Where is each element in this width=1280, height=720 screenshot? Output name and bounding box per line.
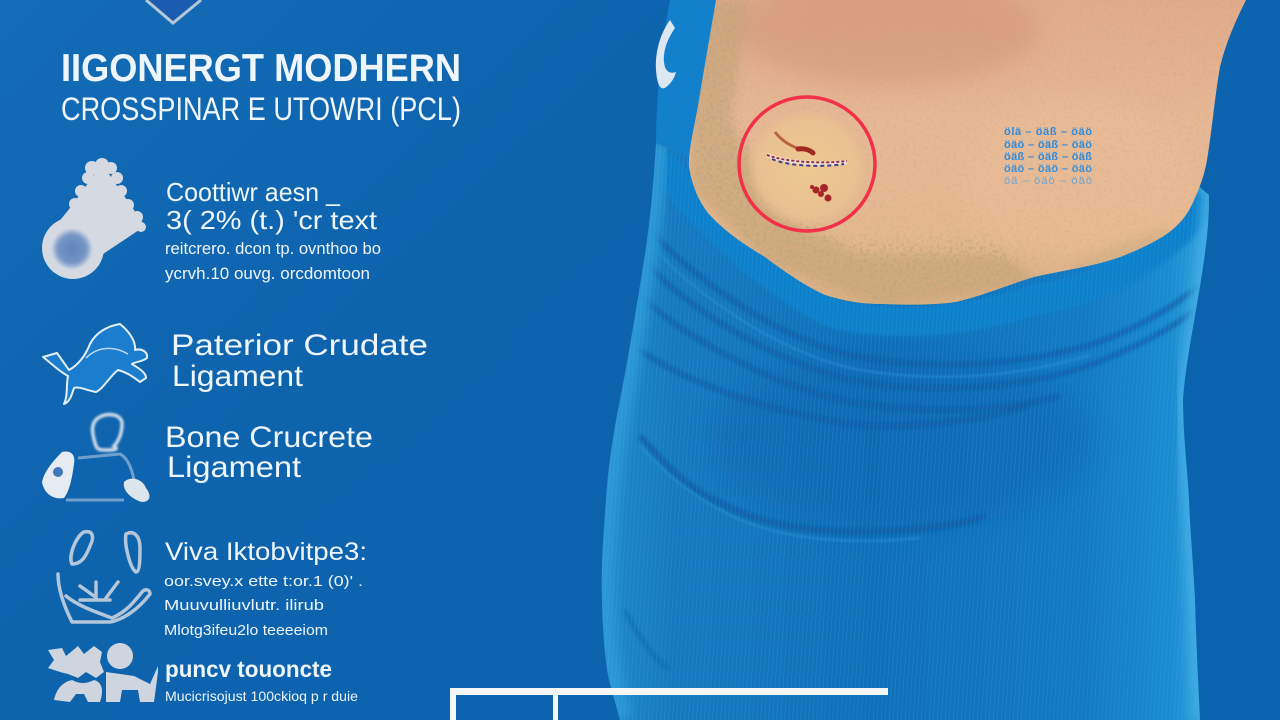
small blue label table: öäß – öäß – öäß <box>1004 151 1092 163</box>
text block: item one: Coottiwr aesn _ <box>166 177 341 207</box>
icon: pieces and seated person <box>48 643 158 702</box>
injury callout <box>739 97 875 231</box>
text block: item four: oor.svey.x ette t:or.1 (0)' . <box>164 573 363 590</box>
text block: item one <box>165 177 381 283</box>
text block: item four <box>164 538 367 639</box>
small blue label table <box>1004 126 1092 187</box>
title <box>61 47 461 127</box>
icon: bone joint <box>42 158 146 279</box>
wounds <box>767 132 847 202</box>
text block: item four: Viva Iktobvitpe3: <box>165 538 367 566</box>
left and right edge highlights <box>602 143 656 720</box>
text block: item one: 3( 2% (t.) 'cr text <box>166 205 378 235</box>
text block: item four: Muuvulliuvlutr. ilirub <box>164 597 324 614</box>
panel: item two <box>43 324 428 404</box>
small blue label table: öäö – öäö – öäö <box>1004 163 1092 175</box>
text block: item five <box>165 656 358 704</box>
icon: lion <box>43 324 147 404</box>
small blue label table: ölä – öäß – öäö <box>1004 126 1092 138</box>
small blue label table: öäö – öäß – öäö <box>1004 139 1092 151</box>
compression sleeve <box>590 130 1230 720</box>
knee photo illustration <box>590 0 1250 720</box>
icon: shield tip <box>146 0 201 23</box>
cuff band <box>660 160 1206 321</box>
text block: item three: Bone Crucrete <box>165 421 373 454</box>
text block: item two: Paterior Crudate <box>171 329 428 362</box>
text block: item three: Ligament <box>167 451 302 484</box>
panel: item four <box>58 532 367 639</box>
fabric folds <box>625 230 1200 670</box>
panel: item one <box>42 158 381 283</box>
table frame <box>450 688 888 720</box>
panel: item five <box>48 643 358 704</box>
leg skin <box>680 0 1250 310</box>
text block: item one: ycrvh.10 ouvg. orcdomtoon <box>165 264 370 283</box>
title: CROSSPINAR E UTOWRI (PCL) <box>61 91 461 127</box>
panel: item three <box>42 415 373 502</box>
small blue label table: öä – öäö – öäö <box>1004 175 1092 187</box>
title: IIGONERGT MODHERN <box>61 47 461 90</box>
jersey sleeve <box>656 0 720 170</box>
text block: item three <box>165 421 373 484</box>
text block: item two: Ligament <box>172 360 304 393</box>
text block: item one: reitcrero. dcon tp. ovnthoo bo <box>165 239 381 258</box>
text block: item five: puncv touoncte <box>165 656 332 682</box>
icon: hands and arms <box>58 532 150 622</box>
icon: person with bone <box>42 415 149 502</box>
text block: item two <box>171 329 428 393</box>
text block: item five: Mucicrisojust 100ckioq p r duie <box>165 688 358 704</box>
text block: item four: Mlotg3ifeu2lo teeeeiom <box>164 622 328 639</box>
